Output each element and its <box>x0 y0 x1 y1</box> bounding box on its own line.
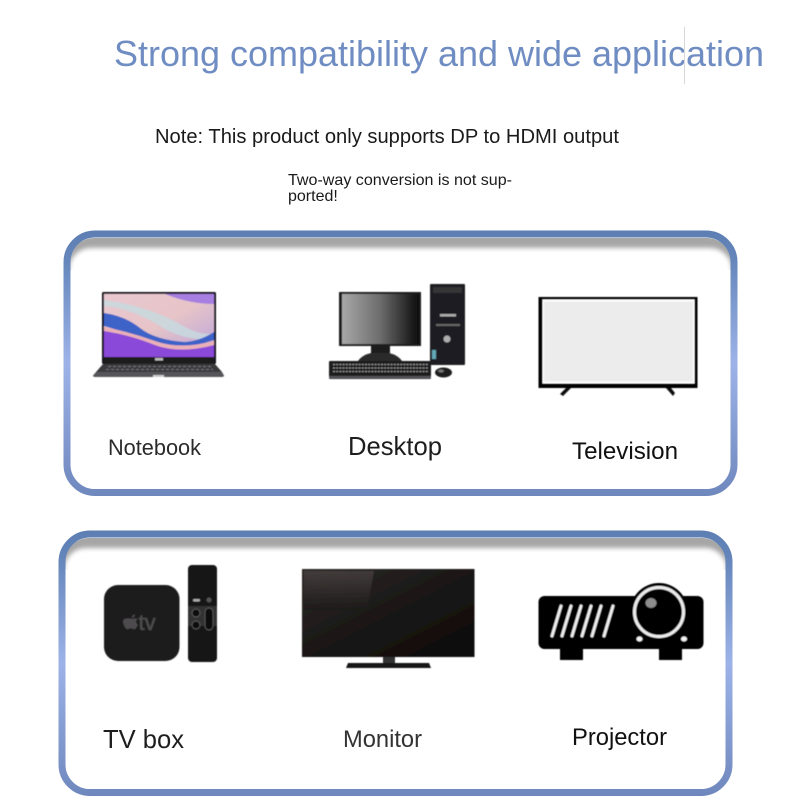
label: desktop: Desktop <box>348 431 442 461</box>
label: notebook: Notebook <box>108 435 202 460</box>
icon: notebook <box>93 292 224 377</box>
icon: desktop computer <box>329 284 465 379</box>
icon: projector <box>538 583 704 660</box>
panel: computers and television <box>64 234 736 492</box>
title: Strong compatibility and wide application <box>114 33 764 74</box>
label: monitor: Monitor <box>343 726 422 753</box>
icon: TV box and remote <box>104 565 217 662</box>
label: projector: Projector <box>572 724 667 751</box>
warning text: Two-way conversion is not sup- <box>288 172 512 189</box>
icon: TV box and remote: tv <box>138 610 156 635</box>
label: television: Television <box>572 438 678 465</box>
note line: Note: This product only supports DP to HDMI output <box>155 126 619 148</box>
icon: television <box>538 297 698 396</box>
icon: monitor <box>302 569 474 668</box>
warning text: ported! <box>288 188 338 205</box>
warning text <box>288 172 512 205</box>
panel: other devices <box>59 534 731 792</box>
label: TV box: TV box <box>103 724 184 754</box>
